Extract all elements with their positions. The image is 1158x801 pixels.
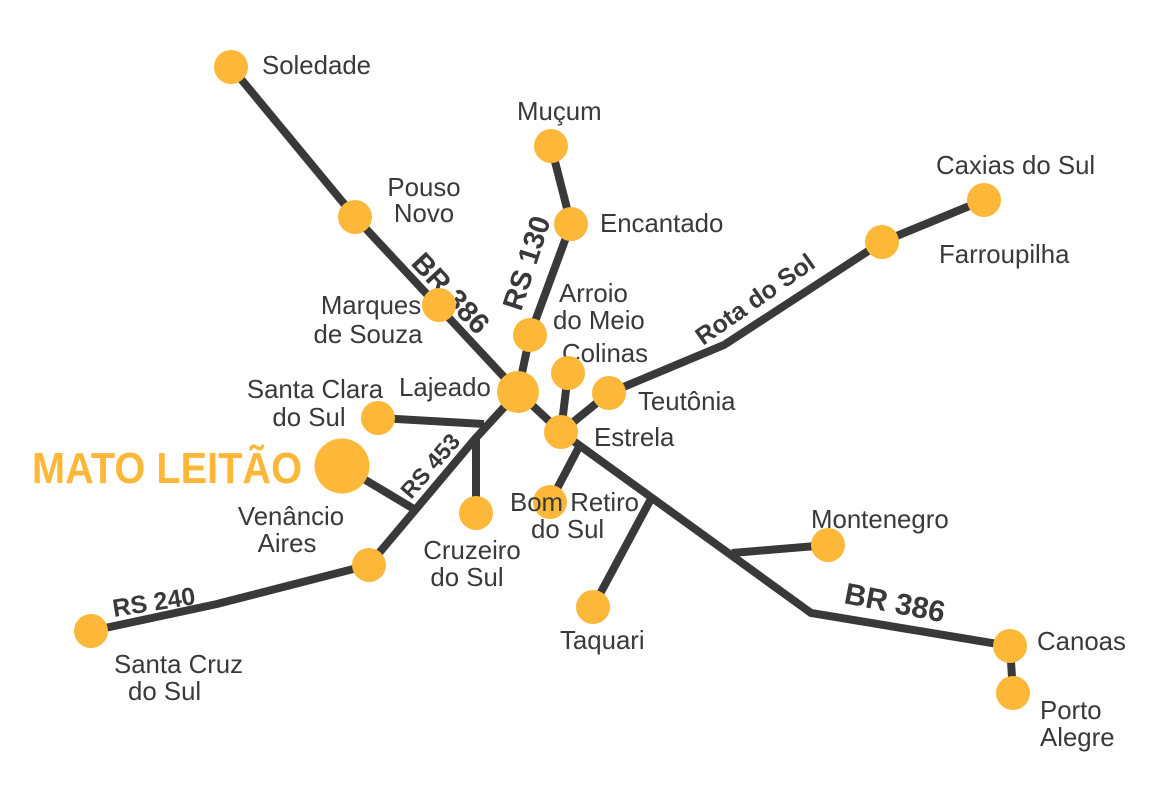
city: Bom Retiro do Sul: do Sul [531,516,604,544]
city: Canoas: Canoas [1037,628,1126,656]
city: Arroio do Meio: do Meio [553,307,645,335]
city: Bom Retiro do Sul: Bom Retiro [510,489,639,517]
road: Lajeado to Estrela and BR 386 south [518,392,1013,693]
marker: Cruzeiro do Sul [459,496,493,530]
road: Cruzeiro link [472,436,480,513]
city: Teutônia: Teutônia [638,388,736,416]
city: Venâncio Aires: Aires [258,530,316,558]
city: Estrela: Estrela [594,424,675,452]
road labels [111,212,948,629]
marker: Estrela [544,415,578,449]
city: Pouso Novo: Novo [394,200,454,228]
marker: Lajeado [497,371,539,413]
city: Cruzeiro do Sul: Cruzeiro [423,537,521,565]
marker: Encantado [554,207,588,241]
city: Porto Alegre: Porto [1040,697,1102,725]
city: Cruzeiro do Sul: do Sul [430,564,504,592]
label: Rota do Sol: Rota do Sol [690,248,820,351]
city: Arroio do Meio: Arroio [559,280,628,308]
label: BR 386 south: BR 386 [842,577,948,629]
city: Santa Cruz do Sul: Santa Cruz [114,651,243,679]
city: Marques de Souza: Marques [321,292,421,320]
marker: Taquari [576,590,610,624]
road: Bom Retiro link [550,445,580,502]
road network [91,67,1013,693]
label: RS 130: RS 130 [497,212,558,314]
city: Santa Clara do Sul: do Sul [272,404,346,432]
city: Marques de Souza: de Souza [313,321,423,349]
marker: Bom Retiro do Sul [533,485,567,519]
city markers [74,50,1030,710]
road: RS 130 to Muçum [518,146,571,392]
marker: Soledade [214,50,248,84]
marker: Caxias do Sul [967,183,1001,217]
marker: Arroio do Meio [513,318,547,352]
marker: Porto Alegre [996,676,1030,710]
marker: Santa Cruz do Sul [74,614,108,648]
marker: Marques de Souza [422,288,456,322]
city: Santa Clara do Sul: Santa Clara [247,376,384,404]
city: Porto Alegre: Alegre [1040,724,1115,752]
title: Mato Leitão: MATO LEITÃO [32,443,302,493]
marker: Santa Clara do Sul [361,401,395,435]
marker: Colinas [551,356,585,390]
city: Pouso Novo: Pouso [387,174,461,202]
road: Rota do Sol to Caxias do Sul [561,200,984,432]
city: Caxias do Sul: Caxias do Sul [936,152,1095,180]
marker: Canoas [993,629,1027,663]
marker: Montenegro [811,528,845,562]
city: Lajeado: Lajeado [399,374,491,402]
marker: Muçum [534,129,568,163]
city: Taquari: Taquari [560,627,645,655]
road: RS 453 and RS 240 [91,392,518,631]
label: RS 453: RS 453 [395,428,465,503]
road: Taquari link [593,497,652,607]
marker: Pouso Novo [338,200,372,234]
road: Colinas link [561,373,568,432]
marker: Farroupilha [865,225,899,259]
label: RS 240: RS 240 [111,582,197,623]
city: Encantado: Encantado [600,210,723,238]
city: Farroupilha: Farroupilha [939,241,1070,269]
marker: Venâncio Aires [352,548,386,582]
city: Montenegro: Montenegro [811,506,949,534]
road: Montenegro link [732,545,828,553]
city: Venâncio Aires: Venâncio [238,503,344,531]
city: Colinas: Colinas [562,340,648,368]
label: BR 386 north: BR 386 [405,247,495,341]
marker: Mato Leitão [314,438,370,494]
city: Santa Cruz do Sul: do Sul [128,678,201,706]
road: Mato Leitão link [342,466,414,509]
marker: Teutônia [592,376,626,410]
city: Muçum: Muçum [517,98,602,126]
city names [114,52,1126,752]
city: Soledade: Soledade [262,52,371,80]
road: BR 386 north to Soledade [231,67,518,392]
road: Santa Clara link [378,418,484,424]
